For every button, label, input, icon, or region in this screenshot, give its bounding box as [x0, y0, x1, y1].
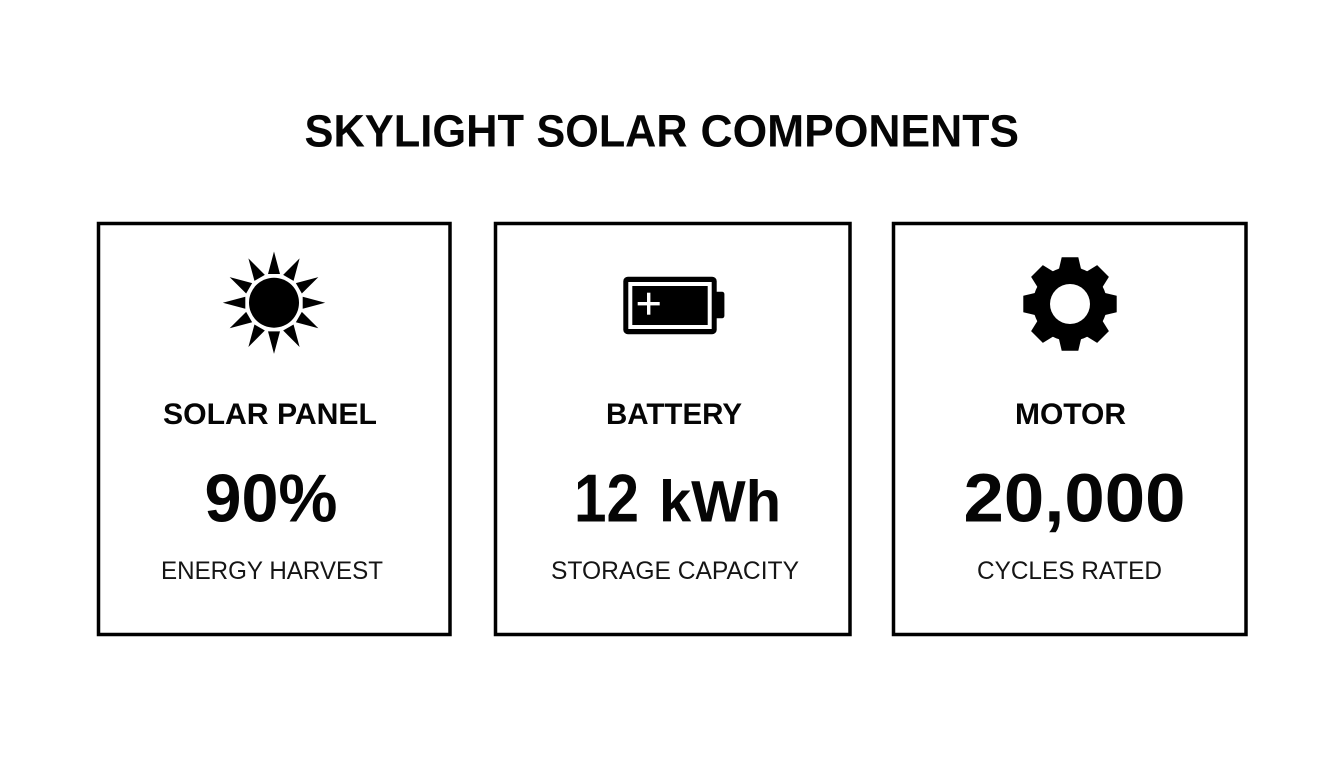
metric: 90%: 90%	[204, 460, 338, 536]
panel: battery	[496, 224, 850, 634]
metric label: storage capacity: STORAGE CAPACITY	[551, 557, 799, 585]
component name: motor: MOTOR	[1015, 398, 1126, 431]
metric label: cycles rated: CYCLES RATED	[977, 557, 1162, 585]
component name: solar panel: SOLAR PANEL	[163, 398, 377, 431]
component name: battery: BATTERY	[606, 398, 742, 431]
icon: gear	[1023, 257, 1117, 351]
card border: solar panel	[98, 224, 450, 634]
card border: motor	[894, 224, 1246, 634]
metric: 12 kWh: kWh	[659, 470, 781, 534]
title: SKYLIGHT	[304, 106, 524, 157]
icon: sun	[223, 252, 325, 354]
title: SOLAR	[536, 106, 688, 157]
title: COMPONENTS	[700, 106, 1019, 157]
card border: battery	[496, 224, 850, 634]
metric label: energy harvest: ENERGY HARVEST	[161, 557, 383, 585]
panel: motor	[894, 224, 1246, 634]
title	[304, 106, 1019, 157]
icon: battery	[623, 277, 724, 334]
panel: solar panel	[98, 224, 450, 634]
metric: 12 kWh	[574, 460, 781, 536]
metric: 12 kWh: 12	[574, 460, 639, 536]
metric: 20,000: 20,000	[964, 460, 1186, 536]
